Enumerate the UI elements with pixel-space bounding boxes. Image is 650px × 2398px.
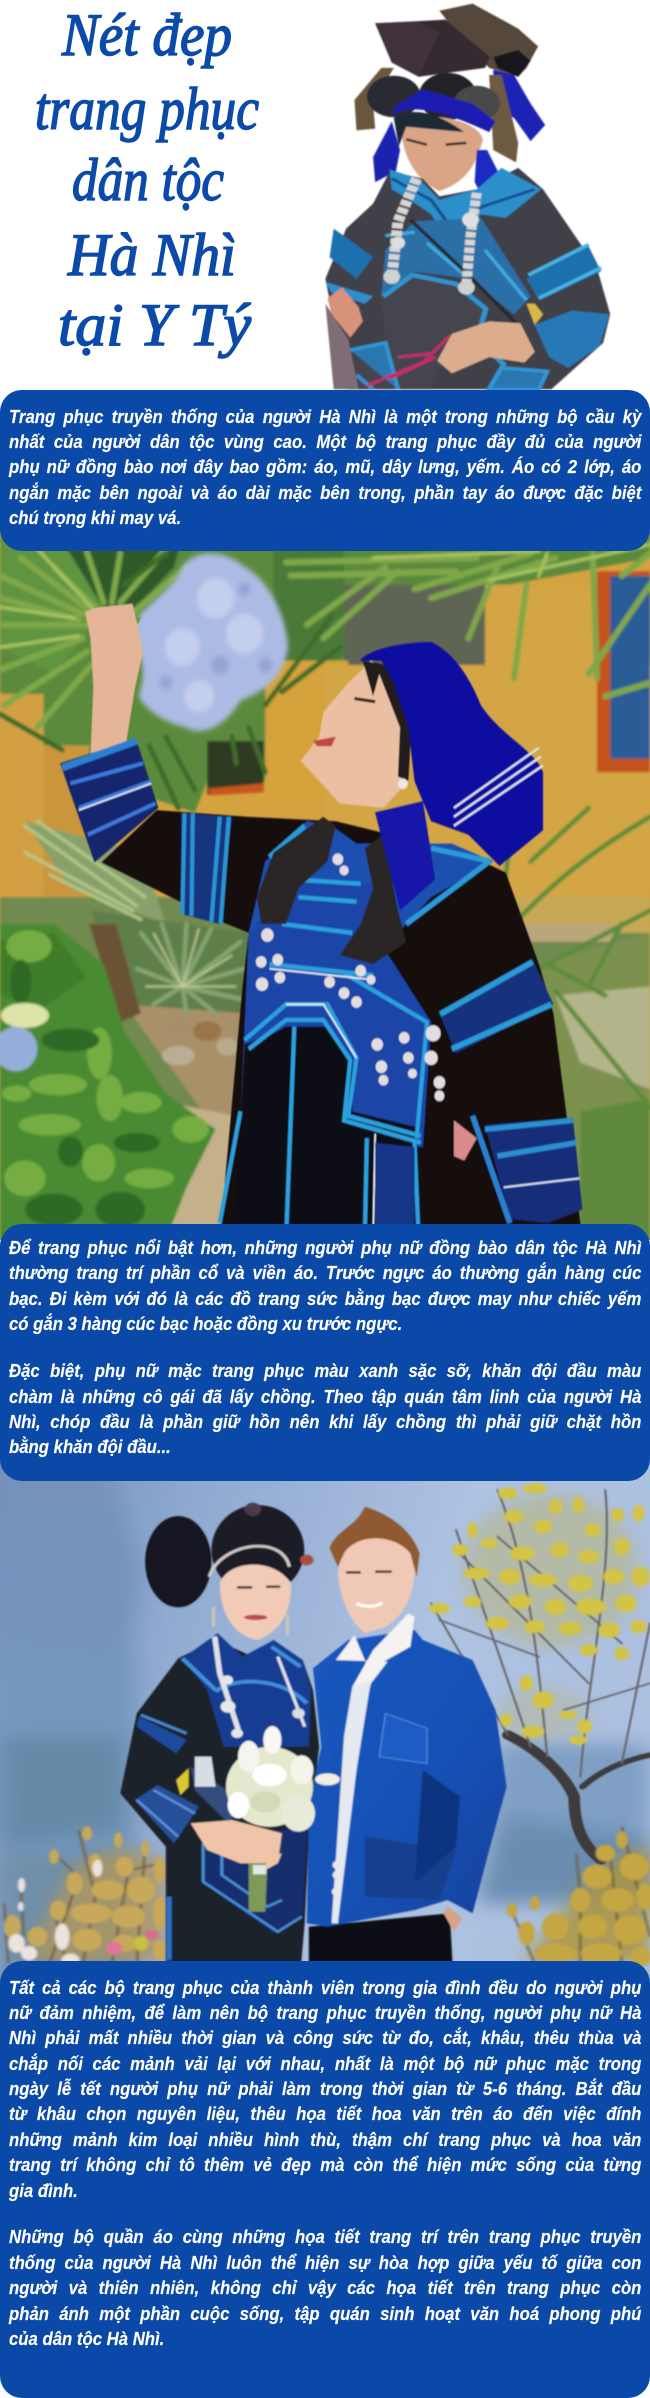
neck and collar — [249, 821, 493, 951]
panel: craft and meaning text: Tất cả các bộ trang phục của thành viên trong gia đình đều do người phụ — [9, 1978, 641, 1998]
photo: couple in traditional costume on misty mountain — [0, 1460, 650, 1982]
photo: elderly Ha Nhi woman with headdress — [324, 2, 612, 390]
title: trang phục — [35, 76, 259, 142]
panel: costume decoration text: chàm là những cô gái đã lấy chồng. Theo tập quán tâm linh của người Hà — [9, 1387, 641, 1407]
long hair left lock — [257, 817, 336, 924]
arm stripes — [181, 813, 232, 924]
panel: costume decoration text — [0, 1224, 650, 1481]
panel: craft and meaning text: Những bộ quần áo cùng những họa tiết trang trí trên trang phục truyền — [9, 2227, 641, 2247]
bottom-left shrub — [0, 924, 216, 1240]
hair braids — [367, 76, 421, 117]
man: jacket — [307, 1630, 507, 1927]
man: shirt placket — [332, 1613, 415, 1923]
title: Nét đẹp — [61, 2, 232, 68]
figure black garment — [102, 810, 580, 1240]
right greenery — [539, 933, 650, 1240]
blossom shrub left — [4, 1826, 166, 1967]
panel: intro text: phụ nữ đồng bào nơi đây bao gồm: áo, mũ, dây lưng, yếm. Áo có 2 lớp, áo — [9, 457, 641, 477]
lower palm fan — [25, 821, 145, 920]
collar and chest embroidered — [390, 168, 541, 246]
grey cloth left — [325, 304, 359, 389]
right blue tassel — [493, 70, 545, 141]
yellow blossoms — [429, 1483, 650, 1745]
bouquet — [249, 1863, 267, 1912]
title: tại Y Tý — [58, 292, 251, 358]
tree — [431, 1490, 650, 1860]
brown fringes — [489, 75, 518, 162]
panel: craft and meaning text: gia đình. — [9, 2181, 78, 2201]
panel: costume decoration text: bạc. Đi kèm với đó là các đồ trang sức bằng bạc được may như chiếc yếm — [9, 1289, 641, 1309]
pink thread — [367, 336, 450, 386]
panel: costume decoration text: Đặc biệt, phụ nữ mặc trang phục màu xanh sặc sỡ, khăn đội đầu màu — [9, 1361, 641, 1381]
panel: intro text: Trang phục truyền thống của người Hà Nhì là một trong những bộ cầu kỳ — [9, 407, 641, 427]
blossom shrub right — [507, 1827, 650, 1966]
panel: craft and meaning text: Nhì phải mất nhiều thời gian và công sức từ đo, cắt, khâu, thêu thùa và — [9, 2028, 641, 2048]
blossom tone patches — [25, 1493, 650, 1963]
sleeve cuff — [60, 739, 158, 862]
panel: craft and meaning text — [0, 1961, 650, 2398]
man: legs — [309, 1913, 454, 1990]
silver necklace — [392, 179, 417, 279]
palm fronds top — [0, 540, 650, 728]
panel: intro text — [0, 390, 650, 551]
panel: craft and meaning text: của dân tộc Hà Nhì. — [9, 2329, 164, 2349]
panel: craft and meaning text: từ khâu chọn nguyên liệu, thêu họa tiết hoa văn trên áo đến việc đính — [9, 2104, 641, 2124]
panel: craft and meaning text: trang trí không chỉ tô thêm vẻ đẹp mà còn thể hiện mức sống của từng — [9, 2155, 641, 2175]
strap — [410, 220, 516, 323]
title — [35, 2, 260, 359]
photo: hydrangea woman in Ha Nhi costume — [0, 529, 650, 1240]
hands — [327, 288, 363, 338]
right sleeve bands — [439, 960, 553, 1053]
panel: intro text: chú trọng khi may vá. — [9, 508, 181, 528]
body dark coat — [325, 168, 610, 389]
panel: craft and meaning text: nữ đảm nhiệm, để làm nên bộ trang phục truyền thống, người phụ nữ Hà — [9, 2003, 641, 2023]
blue scarf — [360, 642, 543, 866]
raised arm — [85, 603, 143, 759]
face — [301, 661, 408, 808]
woman: hand — [191, 1820, 282, 1863]
icon: woven tassel bundle — [439, 4, 538, 77]
blue side tassels — [373, 121, 400, 182]
panel: craft and meaning text: chắp nối các mảnh vải lại với nhau, nhất là một bộ nữ phục mặc trong — [9, 2054, 641, 2074]
face — [400, 117, 483, 191]
hydrangea bloom — [133, 553, 288, 731]
panel: intro text: ngắn mặc bên ngoài và áo dài mặc bên trong, phần tay áo được đặc biệt — [9, 483, 641, 503]
woman: face — [220, 1565, 291, 1640]
panel: craft and meaning text: ngày lễ tết người phụ nữ phải làm trong thời gian từ 5-6 tháng. Bắt đầu — [9, 2079, 641, 2099]
panel: craft and meaning text: người và thiên nhiên, không chỉ vậy các họa tiết trên trang phục còn — [9, 2278, 641, 2298]
hat — [375, 20, 490, 77]
woman: hair — [145, 1516, 211, 1607]
panel: costume decoration text: bằng khăn đội đầu... — [9, 1437, 171, 1457]
long hair right lock — [340, 835, 406, 964]
panel: costume decoration text: Nhì, chóp đầu là phần giữ hồn nên khi lấy chồng thì phải giữ chặt hồn — [9, 1412, 641, 1432]
embroidered chest panel — [240, 879, 431, 1147]
panel: craft and meaning text: phản ánh một phần cuộc sống, tập quán sinh hoạt văn hoá phong phú — [9, 2304, 641, 2324]
panel: intro text: nhất của người dân tộc vùng cao. Một bộ trang phục đầy đủ của người — [9, 432, 641, 452]
panel: costume decoration text: có gắn 3 hàng cúc bạc hoặc đồng xu trước ngực. — [9, 1314, 402, 1334]
title: dân tộc — [72, 147, 224, 213]
panel: costume decoration text: Để trang phục nổi bật hơn, những người phụ nữ đồng bào dân tộc Hà Nhì — [9, 1238, 641, 1258]
panel: craft and meaning text: những mảnh kim loại nhiều hình thù, thậm chí trang phục và hoa văn — [9, 2130, 641, 2150]
woman: body — [120, 1640, 319, 1970]
chest central black arch — [232, 1027, 419, 1240]
man: head — [338, 1537, 415, 1633]
panel: craft and meaning text: thống của người Hà Nhì luôn thể hiện sự hòa hợp giữa yếu tố giữa con — [9, 2253, 641, 2273]
panel: costume decoration text: thường trang trí phần cổ và viền áo. Trước ngực áo thường gắn hàng cúc — [9, 1263, 641, 1283]
silver buttons — [256, 853, 445, 1101]
title: Hà Nhì — [67, 222, 236, 288]
sleeves bands — [526, 246, 601, 300]
